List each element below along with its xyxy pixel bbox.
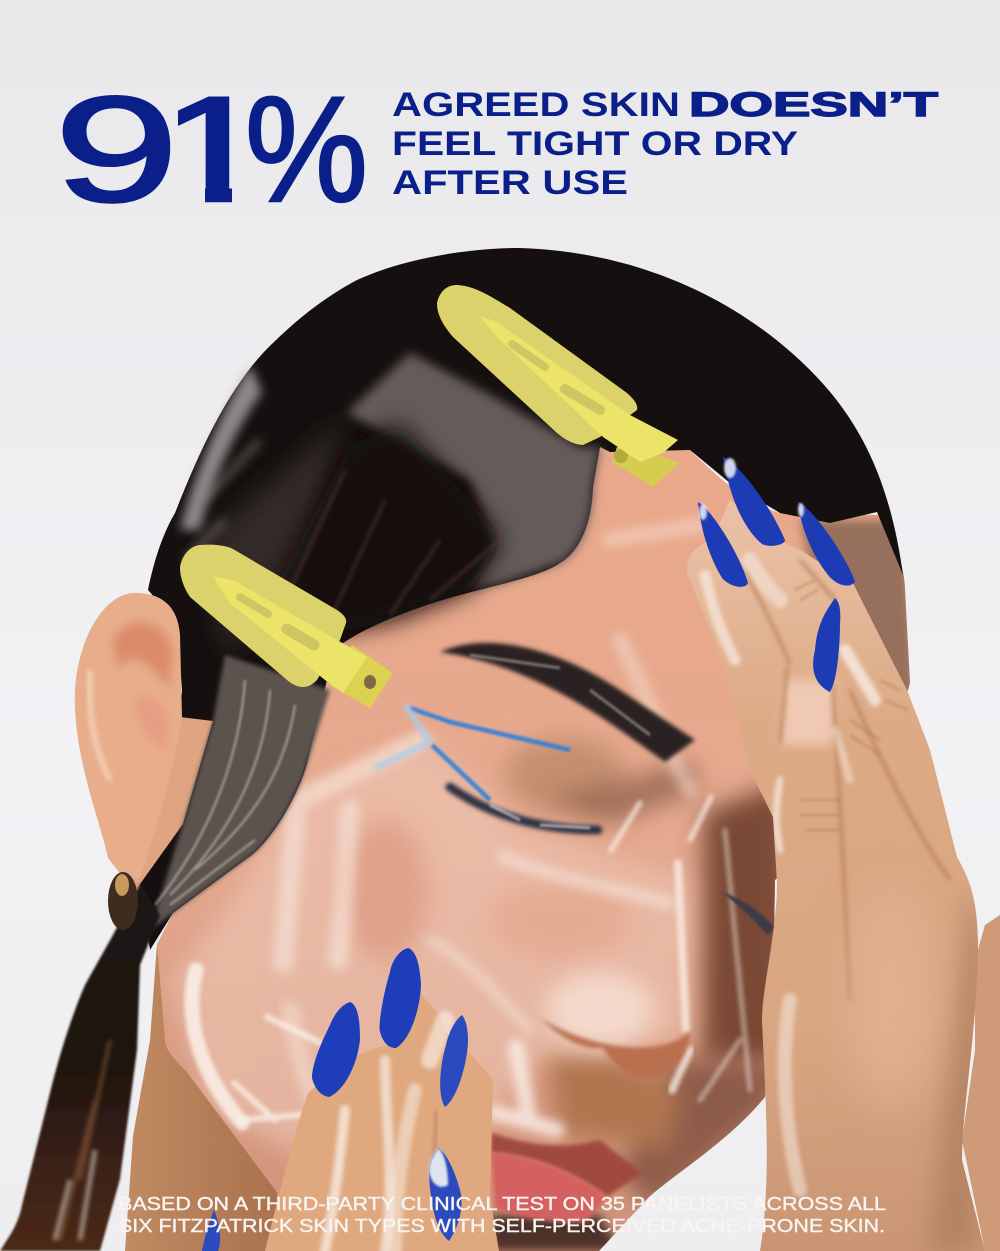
left hand	[265, 993, 499, 1251]
foam on left fingers	[325, 1020, 445, 1251]
hair sheen: front band	[347, 353, 600, 590]
foam on fingers	[705, 560, 875, 1190]
strand tail	[0, 884, 160, 1251]
temple shade	[796, 515, 910, 692]
face	[157, 447, 915, 1251]
earring	[108, 872, 138, 930]
footnote: SIX FITZPATRICK SKIN TYPES WITH SELF-PERCEIVED ACNE-PRONE SKIN.	[118, 1216, 885, 1236]
skin behind ear	[120, 690, 216, 890]
footnote: BASED ON A THIRD-PARTY CLINICAL TEST ON 35 PANELISTS ACROSS ALL	[118, 1194, 886, 1214]
nose	[540, 972, 690, 1079]
right hand	[687, 500, 990, 1251]
clip: lower yellow hair clip	[180, 545, 393, 708]
knuckle wrinkles	[795, 580, 908, 830]
right shade	[926, 896, 982, 1251]
forehead foam	[610, 525, 700, 790]
palm highlight	[846, 917, 924, 1096]
left hand nails	[202, 948, 468, 1251]
clip: top yellow hair clip	[437, 285, 680, 487]
neck	[125, 944, 290, 1251]
hair brown strands	[290, 470, 500, 620]
warm cheek patch	[343, 820, 427, 960]
eyebrow	[440, 643, 695, 762]
foam streaks	[192, 740, 750, 1130]
far eye	[722, 892, 775, 935]
headline stat: 91%	[54, 65, 368, 233]
hair dark core	[270, 425, 500, 640]
cheek foam wash	[170, 740, 690, 1170]
right hand nails	[698, 457, 855, 692]
footnote	[118, 1194, 886, 1236]
headline stat: 91%: %	[245, 65, 368, 233]
nail tips foam	[699, 458, 804, 520]
strand highlights	[155, 680, 295, 905]
headline text	[392, 86, 938, 202]
headline text: AFTER USE	[392, 164, 628, 202]
lips	[491, 1133, 642, 1223]
hair	[0, 248, 903, 1251]
finger creases	[745, 560, 950, 1000]
far-right hand sliver	[962, 915, 1000, 1251]
ear	[75, 593, 182, 880]
headline text: DOESN’T	[689, 86, 938, 124]
hair soft brown band	[205, 420, 345, 650]
hair sheen: left edge	[180, 365, 262, 530]
eye socket	[505, 737, 625, 813]
under-nose shade	[545, 1047, 680, 1150]
jaw shade	[620, 1060, 790, 1210]
headline text: AGREED SKIN	[392, 86, 680, 124]
headline stat: 91%: 1	[151, 65, 276, 233]
peach finger	[780, 680, 835, 745]
headline stat: 91%: 9	[54, 65, 179, 233]
dark cheek by the hand	[703, 780, 790, 1063]
eyelashes and blue liner	[375, 705, 598, 830]
hair sheen: strand below clip	[150, 655, 330, 930]
below lips	[490, 1215, 620, 1251]
face tone and foam, clipped to the face	[170, 520, 915, 1251]
headline text: FEEL TIGHT OR DRY	[392, 125, 798, 163]
